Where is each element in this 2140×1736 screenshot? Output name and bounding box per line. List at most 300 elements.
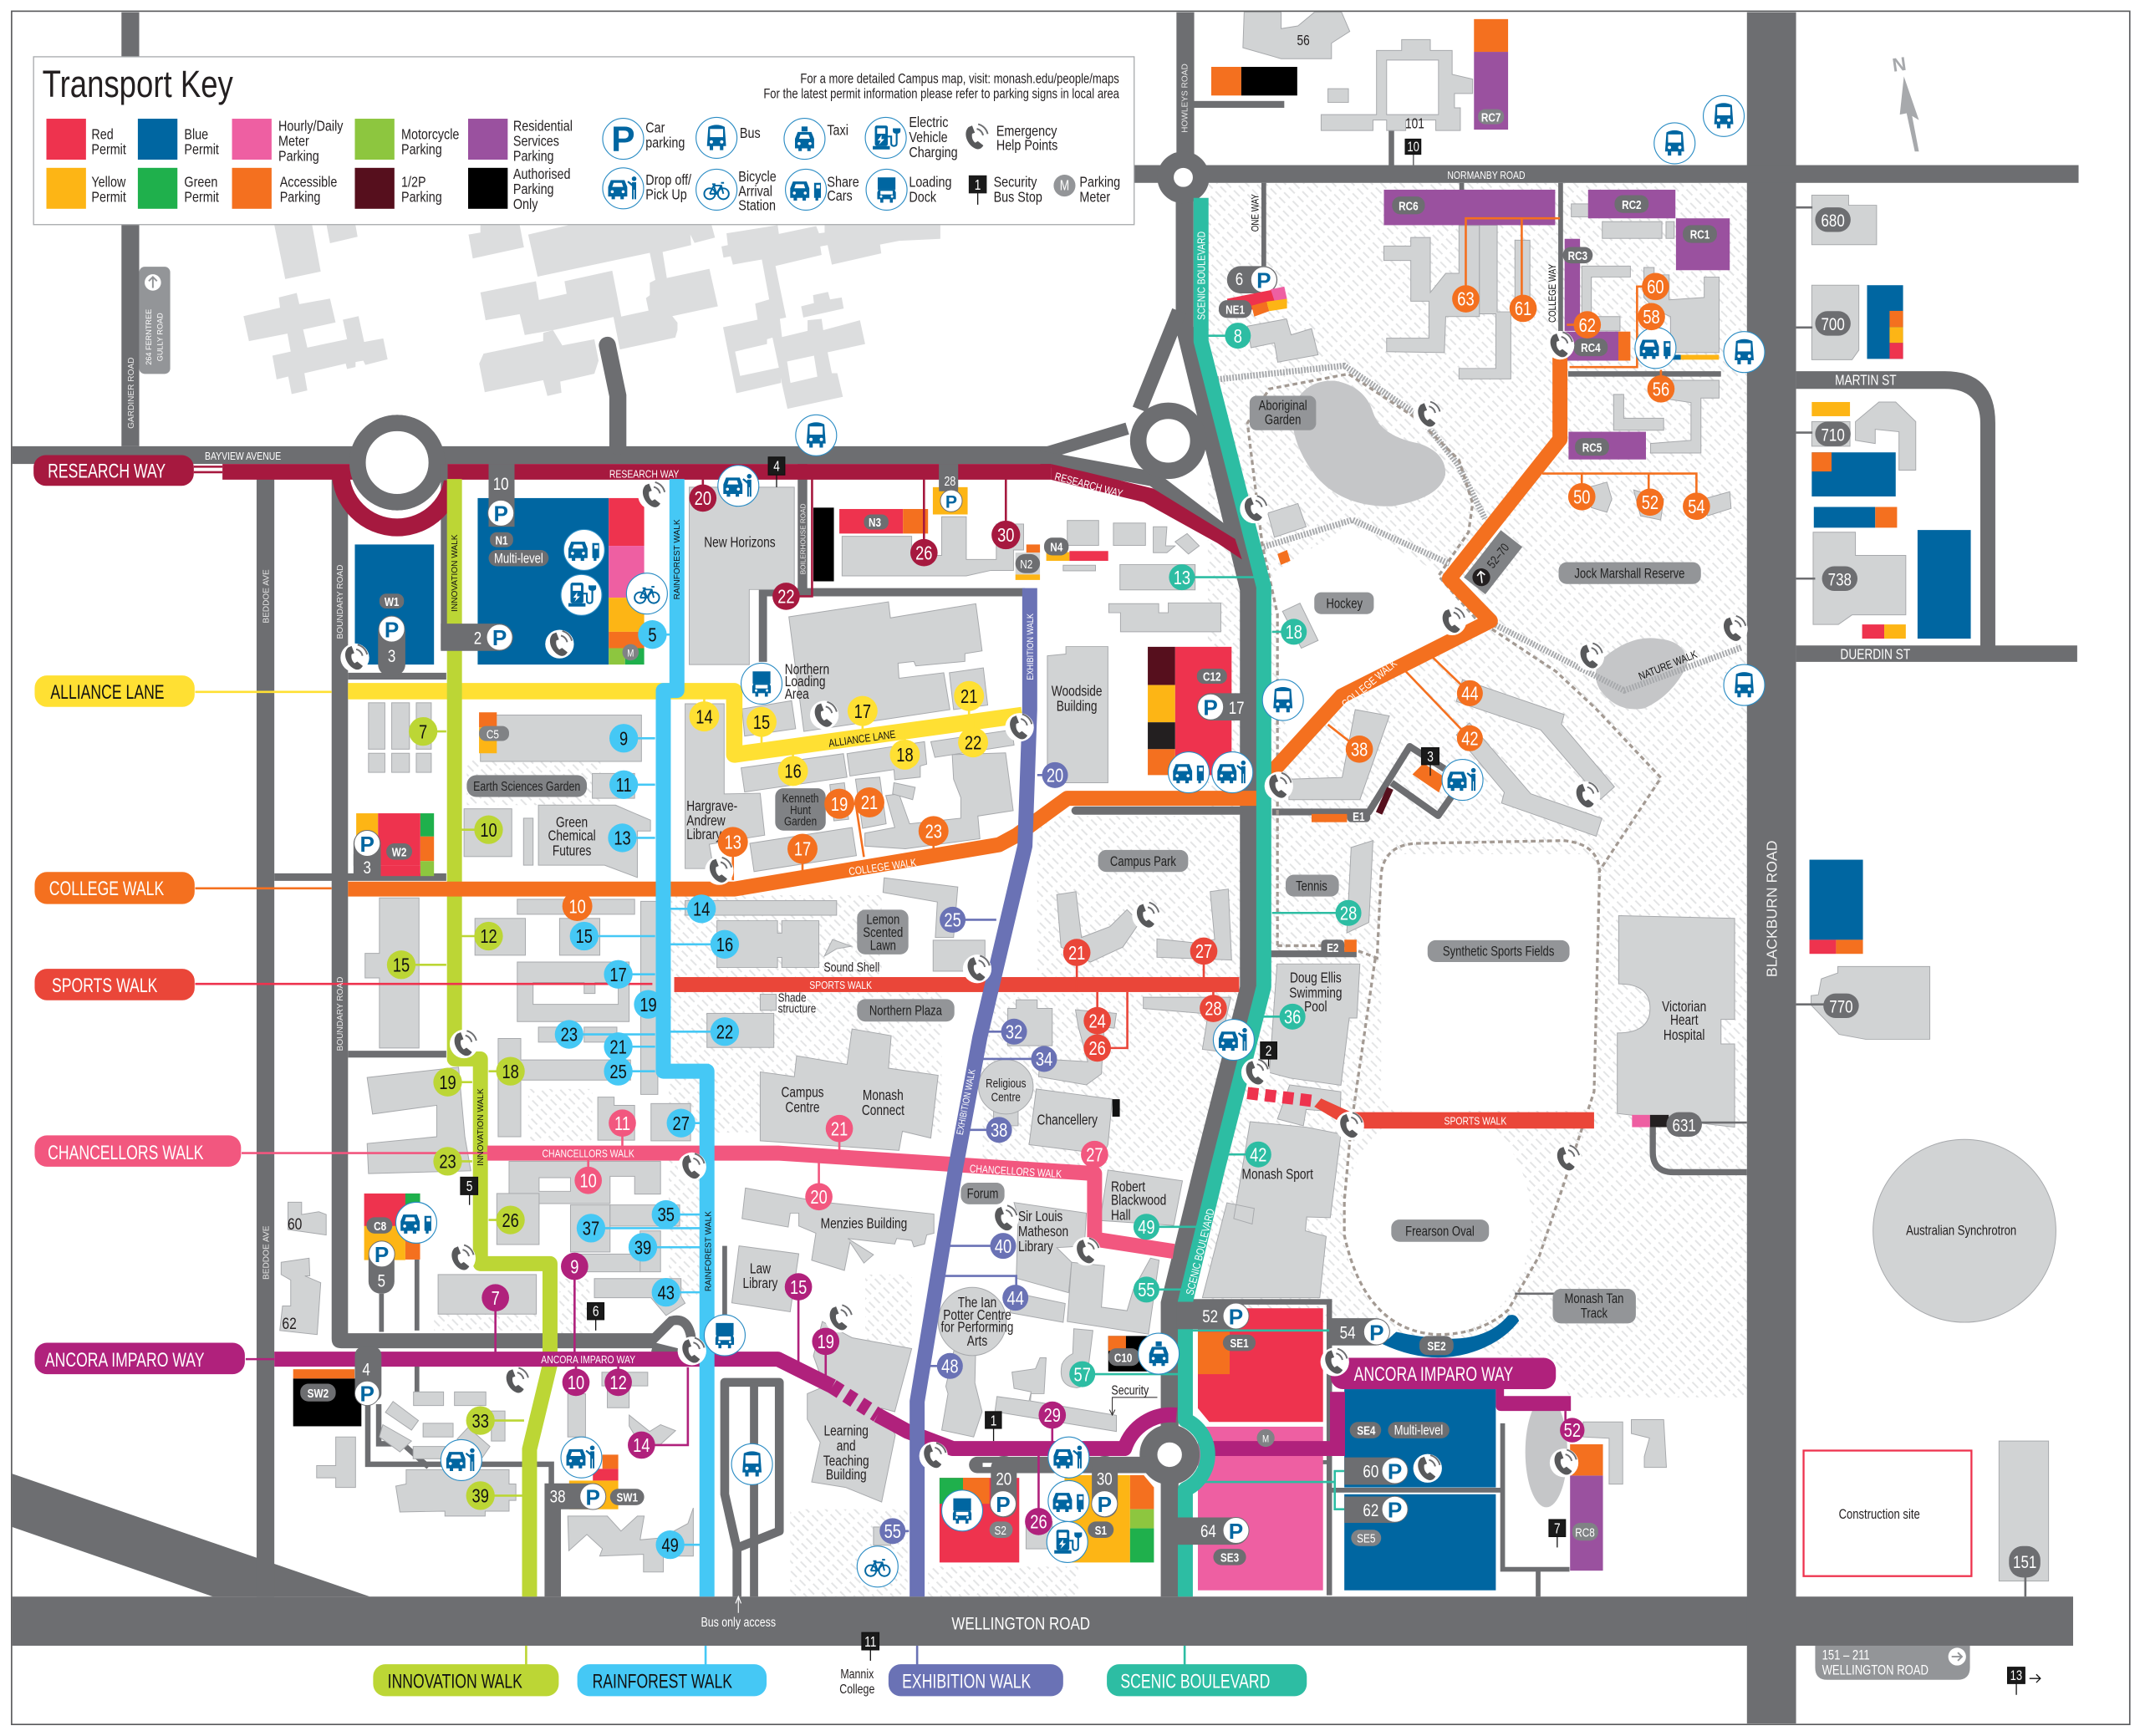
stub: 20 P: P <box>996 1492 1011 1517</box>
bus stop 1: 1 <box>991 1413 996 1429</box>
name: The Ian Potter Centre: Arts <box>967 1333 987 1349</box>
stub: 54 P <box>1329 1318 1389 1346</box>
code: SE2: SE2 <box>1427 1339 1446 1353</box>
stub: 10 P: 10 <box>493 475 509 495</box>
number badges: College Walk: 13 <box>725 832 741 853</box>
parking: C10 <box>1108 1336 1154 1372</box>
panel: Transport Key <box>33 57 1134 225</box>
key: security bus stop: 1 <box>975 178 981 193</box>
hatched campus grounds <box>434 183 1747 1596</box>
code: N3 <box>864 515 889 530</box>
pill: Exhibition Walk: EXHIBITION WALK <box>902 1670 1031 1693</box>
number badges: Ancora Imparo Way: 12 <box>609 1372 627 1394</box>
number badges: Research Way <box>689 485 1020 610</box>
icon: bus north east 2 <box>1654 123 1695 164</box>
name: Learning and Teaching Building <box>823 1423 869 1483</box>
key swatch labels: Permit <box>184 189 219 206</box>
sports fields and ovals white space <box>1272 524 1597 1336</box>
building: 101 <box>1321 39 1473 130</box>
walk: Exhibition Walk <box>917 588 1030 1596</box>
stub: 54 P: 54 <box>1340 1324 1356 1343</box>
road name: Rainforest Walk south: RAINFOREST WALK <box>705 1211 714 1291</box>
key swatch labels: Permit <box>184 141 219 158</box>
number badges: Scenic Boulevard: 55 <box>1138 1280 1155 1301</box>
code: RC5: RC5 <box>1582 440 1602 455</box>
parking: S1 <box>1064 1475 1130 1562</box>
pill: Ancora Imparo Way east <box>1331 1357 1571 1411</box>
name: Robert Blackwood Hall: Blackwood <box>1111 1193 1166 1209</box>
key icon labels: Help Points <box>996 137 1057 154</box>
key icon labels: Drop off/ <box>645 172 691 189</box>
pill: Sports Walk: SPORTS WALK <box>52 974 157 997</box>
key swatch labels: Permit <box>91 189 126 206</box>
stub: 62 P <box>1344 1496 1408 1523</box>
stub: 10 P: P <box>493 501 508 527</box>
number badges: Alliance Lane: 21 <box>960 686 977 707</box>
road name: Ancora Imparo Way: ANCORA IMPARO WAY <box>541 1353 635 1366</box>
key icon labels: Taxi <box>827 122 848 139</box>
key icon labels: Bus <box>740 125 761 141</box>
building: 42 <box>1456 723 1602 836</box>
code: S2: S2 <box>995 1524 1006 1537</box>
parking: SE5 <box>1344 1494 1495 1591</box>
road name: Beddoe Ave south: BEDDOE AVE <box>262 1225 272 1280</box>
parking: SW2 <box>293 1378 361 1426</box>
key swatch labels: Parking <box>513 148 554 165</box>
parking: black loading bay <box>813 507 834 582</box>
parking: N2 <box>1027 544 1040 552</box>
small car park codes <box>300 109 1717 1565</box>
pill: Chancellors Walk <box>34 1135 241 1167</box>
label: Kenneth Hunt Garden: Garden <box>784 815 817 828</box>
number badges: Innovation Walk: 18 <box>502 1061 519 1082</box>
pill: Exhibition Walk <box>889 1664 1063 1696</box>
label: Aboriginal Garden: Aboriginal <box>1259 399 1307 414</box>
name: Sir Louis Matheson Library: Matheson <box>1018 1224 1068 1240</box>
code: N4: N4 <box>1050 540 1063 554</box>
code: SW2: SW2 <box>308 1387 329 1400</box>
stub: 4 P <box>354 1347 381 1407</box>
stub: 2 P: 2 <box>474 629 482 649</box>
number badges: Ancora Imparo Way: 26 <box>1030 1512 1047 1533</box>
key icon labels: Cars <box>827 188 853 204</box>
label: Kenneth Hunt Garden <box>775 788 826 831</box>
code: C10: C10 <box>1114 1351 1132 1365</box>
stub: 38 P: 38 <box>550 1488 566 1507</box>
label: Synthetic Sports Fields: Synthetic Sports Fields <box>1443 944 1554 960</box>
name: Woodside Building: Building <box>1057 699 1098 715</box>
label: Forum <box>960 1183 1005 1204</box>
road name: Exhibition Walk: EXHIBITION WALK <box>1026 613 1036 680</box>
code: SE2 <box>1419 1336 1454 1355</box>
icon: taxi <box>1139 1333 1180 1374</box>
code: SE4 Multi-level: Multi-level <box>1394 1423 1443 1438</box>
name: Security: Security <box>1111 1382 1149 1397</box>
name: Religious Centre: Religious <box>986 1077 1027 1091</box>
thin east road system <box>1332 1423 1570 1596</box>
number badges: Alliance Lane <box>689 681 988 786</box>
key swatch labels: Blue <box>184 126 208 143</box>
building names <box>282 33 2016 1696</box>
name: Learning and Teaching Building: and <box>837 1438 856 1454</box>
tag: 680 <box>1815 207 1851 232</box>
number badges: Rainforest Walk: 14 <box>693 899 710 920</box>
code: RC2 <box>1614 195 1648 213</box>
parking: C5 <box>479 712 497 727</box>
key icon labels: Meter <box>1079 189 1111 206</box>
number badges: Alliance Lane: 22 <box>965 732 981 754</box>
code: RC7: RC7 <box>1481 110 1501 125</box>
road name: Alliance Lane: ALLIANCE LANE <box>828 728 896 750</box>
walk: Scenic Boulevard <box>1185 198 1264 1596</box>
number badges: College Walk: 38 <box>1351 740 1368 761</box>
tag: 700: 700 <box>1821 315 1845 335</box>
stub: 30 P: P <box>1098 1492 1112 1517</box>
north arrow <box>1891 53 1919 151</box>
stub: 3 P W2: 3 <box>363 858 371 878</box>
code: C5: C5 <box>487 727 499 741</box>
name: Mannix College <box>839 1667 875 1696</box>
tag: 770: 770 <box>1829 998 1853 1017</box>
number badges: Ancora Imparo Way <box>482 1253 1585 1535</box>
name: The Ian Potter Centre <box>941 1296 1013 1349</box>
stub: 3 P W1: 3 <box>388 647 395 666</box>
name: Sir Louis Matheson Library <box>1018 1209 1068 1255</box>
key icon labels: Loading <box>909 174 951 191</box>
tag: 631: 631 <box>1673 1117 1696 1136</box>
bus stop 3 <box>1422 748 1439 776</box>
label: Lemon Scented Lawn: Lawn <box>870 939 896 954</box>
number badges: Ancora Imparo Way: 19 <box>818 1331 834 1353</box>
label: Campus Park: Campus Park <box>1110 855 1176 869</box>
name: Victorian Heart Hospital <box>1662 999 1706 1044</box>
parking: NE1: NE1 <box>1225 303 1246 317</box>
name: Campus Centre: Campus <box>782 1085 824 1101</box>
key swatch labels: Only <box>513 196 538 212</box>
roundabouts <box>358 160 1201 502</box>
building: Ian Potter Centre <box>942 1344 982 1437</box>
road name: Gardiner Road: GARDINER ROAD <box>127 358 136 429</box>
name: Woodside Building: Woodside <box>1052 684 1103 700</box>
label: Tennis: Tennis <box>1296 879 1327 894</box>
bus stop 13 <box>2008 1667 2041 1695</box>
name: Sound Shell: Sound Shell <box>823 960 879 975</box>
key title: Transport Key <box>43 63 233 105</box>
number badges: Chancellors Walk: 20 <box>810 1187 828 1209</box>
name: New Horizons: New Horizons <box>704 535 776 551</box>
bus lanes <box>725 1382 779 1596</box>
key icon labels: Charging <box>909 144 958 160</box>
number badges: Rainforest Walk: 22 <box>716 1022 733 1043</box>
bus stop 4 <box>768 457 785 487</box>
code: S2 <box>990 1521 1012 1538</box>
stub: 30 P: 30 <box>1097 1470 1113 1489</box>
icon: share cars RC <box>1635 328 1676 369</box>
icon: bus <box>796 415 837 456</box>
key icons: P <box>611 120 635 159</box>
parking: N3 <box>839 509 903 533</box>
code: W1 <box>380 593 404 608</box>
number badges: College Walk: 58 <box>1643 307 1660 328</box>
key icon labels: Vehicle <box>909 129 948 145</box>
road name: Nature Walk: NATURE WALK <box>1637 648 1699 683</box>
road name: Scenic Boulevard: SCENIC BOULEVARD <box>1195 232 1208 320</box>
signage: 264 Ferntree Gully Road: 264 FERNTREE <box>145 309 153 365</box>
name: The Ian Potter Centre: for Performing <box>941 1320 1013 1336</box>
bus stop 6: 6 <box>593 1304 599 1320</box>
stub: 2 P: P <box>492 625 507 650</box>
number badges: Exhibition Walk: 48 <box>941 1357 958 1377</box>
name: Monash Connect: Connect <box>862 1103 905 1118</box>
label: Monash Tan Track <box>1552 1289 1636 1323</box>
building: Australian Synchrotron <box>1873 1139 2056 1322</box>
parking: SE3 pink <box>1198 1427 1323 1591</box>
number badges: Innovation Walk <box>387 717 525 1510</box>
icon: drop off S1 <box>1048 1437 1089 1478</box>
number badges: Rainforest Walk: 11 <box>616 775 632 796</box>
name: Robert Blackwood Hall: Robert <box>1111 1179 1146 1195</box>
parking: W1 <box>354 544 434 664</box>
parking: NE1 <box>1219 287 1287 318</box>
key icon labels: Bicycle <box>738 169 777 186</box>
building: 44 <box>1456 680 1614 799</box>
name: Learning and Teaching Building: Building <box>826 1467 867 1483</box>
road name: Chancellors Walk east: CHANCELLORS WALK <box>969 1162 1062 1180</box>
code: E2: E2 <box>1327 941 1338 955</box>
key icon labels <box>645 114 1120 214</box>
grey place labels <box>466 395 1701 1323</box>
label: Campus Park <box>1098 850 1188 872</box>
code: S1: S1 <box>1095 1524 1108 1537</box>
number badges: Alliance Lane: 17 <box>854 701 871 722</box>
number badges: Innovation Walk: 7 <box>419 721 427 743</box>
icon: drop off north <box>718 466 759 507</box>
walk: Innovation Walk <box>455 479 550 1596</box>
number badges: Alliance Lane: 18 <box>896 745 914 766</box>
re-draw ring over Research Way <box>358 423 436 502</box>
icon: bus scenic <box>1262 680 1303 720</box>
name: Victorian Heart Hospital: Victorian <box>1662 999 1706 1015</box>
stub: 64 P: P <box>1229 1519 1243 1544</box>
building: Doug Ellis Swimming Pool <box>1269 964 1360 1085</box>
label: Kenneth Hunt Garden: Kenneth <box>782 792 818 805</box>
number badges: Exhibition Walk: 38 <box>991 1120 1007 1142</box>
signage: 151-211 Wellington Road: WELLINGTON ROAD <box>1822 1663 1929 1678</box>
name: Australian Synchrotron: Australian Synchrotron <box>1906 1224 2016 1239</box>
label: Monash Tan Track: Track <box>1581 1306 1608 1321</box>
pill: Innovation Walk: INNOVATION WALK <box>388 1670 522 1693</box>
label: Earth Sciences Garden: Earth Sciences Garden <box>473 779 580 793</box>
number badges: College Walk: 52 <box>1642 492 1658 514</box>
number badges: College Walk: 56 <box>1653 379 1669 400</box>
code: RC6: RC6 <box>1399 199 1419 213</box>
Bayview Avenue <box>13 446 1051 464</box>
label: Monash Tan Track: Monash Tan <box>1565 1292 1623 1307</box>
name: 56: 56 <box>1297 33 1310 48</box>
key note: For a more detailed Campus map, visit: monash.edu/people/maps <box>800 72 1119 87</box>
number badges: Research Way: 26 <box>915 543 932 564</box>
south roundabout <box>1149 1433 1190 1476</box>
tag: 680: 680 <box>1821 211 1845 232</box>
code: C5 <box>479 726 509 741</box>
road name: College Way: COLLEGE WAY <box>1547 263 1559 323</box>
pill: Research Way <box>33 455 194 486</box>
parking: C8 <box>364 1194 420 1226</box>
name: 62: 62 <box>282 1315 297 1333</box>
south internal road <box>977 1460 1146 1470</box>
name: Northern Loading Area: Loading <box>785 675 826 690</box>
number badges: Ancora Imparo Way: 15 <box>790 1277 807 1298</box>
code: S1 <box>1088 1521 1113 1538</box>
name: Religious Centre <box>986 1077 1027 1104</box>
road name: Innovation Walk: INNOVATION WALK <box>451 534 460 612</box>
bus stop 2 <box>1261 1042 1276 1072</box>
walk: College Walk <box>348 798 1262 889</box>
key swatch labels: Red <box>91 126 114 143</box>
stub: 20 P: 20 <box>996 1470 1011 1489</box>
code: W1: W1 <box>385 595 400 608</box>
key swatch labels: Parking <box>401 189 442 206</box>
road name: Boundary Road: BOUNDARY ROAD <box>336 565 345 639</box>
stub road north <box>608 345 618 446</box>
tag: 738 <box>1822 567 1857 591</box>
label: Hockey: Hockey <box>1326 597 1363 612</box>
stub: 52 P <box>1176 1302 1249 1329</box>
parking: RC residential <box>1384 190 1555 225</box>
stub: 52 P: P <box>1229 1304 1243 1329</box>
road name: Exhibition Walk south: EXHIBITION WALK <box>955 1068 978 1136</box>
building: Law Library <box>731 1246 799 1311</box>
key icon labels: Electric <box>909 114 948 130</box>
number badges: Sports Walk: 21 <box>1068 943 1085 964</box>
name: Green Chemical Futures: Futures <box>553 843 592 859</box>
key note <box>763 72 1120 102</box>
name: 101: 101 <box>1405 116 1424 132</box>
icons <box>340 95 1765 1587</box>
stub: 60 P: 60 <box>1363 1463 1378 1482</box>
bus stop 2: 2 <box>1266 1044 1271 1059</box>
stub: 3 P W1 <box>378 616 405 675</box>
key icon labels: Emergency <box>996 123 1057 140</box>
code: SE4 <box>1350 1422 1381 1438</box>
stub: 62 P: 62 <box>1363 1501 1378 1520</box>
number badges: Ancora Imparo Way: 7 <box>492 1288 500 1309</box>
building: Religious Centre <box>994 1108 1018 1126</box>
code: RC4: RC4 <box>1581 341 1601 355</box>
number badges: Rainforest Walk: 19 <box>639 995 657 1016</box>
number badges: Rainforest Walk: 25 <box>609 1061 627 1082</box>
pill: Scenic Boulevard <box>1107 1664 1307 1696</box>
name: The Ian Potter Centre: Potter Centre <box>943 1307 1011 1323</box>
building: Chancellery <box>1029 1089 1113 1154</box>
label: Aboriginal Garden <box>1250 395 1316 430</box>
tag: 631 <box>1666 1112 1702 1137</box>
label: Aboriginal Garden: Garden <box>1265 414 1301 428</box>
Howleys Road <box>1176 13 1195 169</box>
stub: 2 P <box>441 624 513 651</box>
name: Law Library: Library <box>742 1276 778 1292</box>
name: Hargrave-Andrew Library <box>686 798 737 843</box>
parking: N1 multi-level <box>477 498 609 664</box>
number badges: Scenic Boulevard: 49 <box>1138 1217 1155 1238</box>
signage: 264 Ferntree Gully Road: GULLY ROAD <box>155 313 164 361</box>
name: Victorian Heart Hospital: Hospital <box>1664 1028 1704 1044</box>
bus stop 11: 11 <box>864 1634 876 1650</box>
code: SW1 <box>610 1489 645 1505</box>
bus stop 5: 5 <box>466 1179 472 1194</box>
bus stop 11 <box>862 1632 879 1661</box>
name: Mannix College: Mannix <box>840 1667 874 1681</box>
Boundary Road <box>332 479 655 1348</box>
road name: Innovation Walk south: INNOVATION WALK <box>476 1088 486 1166</box>
number badges: Rainforest Walk: 13 <box>614 828 631 849</box>
code: C8: C8 <box>374 1219 386 1233</box>
number badges: Rainforest Walk: 16 <box>716 934 733 955</box>
stub: 38 P: P <box>586 1484 600 1509</box>
name: Sir Louis Matheson Library: Library <box>1018 1240 1053 1255</box>
code: RC5 <box>1575 438 1609 456</box>
icon: bicycle N1 <box>626 573 667 614</box>
icon: EV charging S1 <box>1047 1521 1088 1562</box>
bus stop 1 <box>986 1412 1001 1441</box>
road name: Sports Walk east: SPORTS WALK <box>1444 1114 1506 1128</box>
phones <box>340 331 1748 1483</box>
small road tag 52-70: 52–70 <box>1485 541 1512 571</box>
bus stop 4: 4 <box>773 459 780 475</box>
key icon labels: Parking <box>1079 174 1120 191</box>
code: SE1: SE1 <box>1230 1336 1249 1351</box>
road name: Rainforest Walk: RAINFOREST WALK <box>673 519 682 599</box>
icon: drop off pool <box>1213 1020 1254 1061</box>
number badges: Sports Walk: 28 <box>1205 999 1222 1020</box>
stub: 60 P <box>1344 1458 1408 1484</box>
Wellington Road <box>13 1596 2073 1646</box>
number badges: Innovation Walk: 10 <box>480 820 497 841</box>
building: Learning and Teaching Building <box>808 1321 912 1502</box>
building: central <box>883 878 958 938</box>
code: E1: E1 <box>1353 810 1365 823</box>
road name: Bayview Avenue: BAYVIEW AVENUE <box>205 450 281 463</box>
building: east campus <box>1384 226 1480 353</box>
name: Mannix College: College <box>839 1682 875 1696</box>
name: Menzies Building: Menzies Building <box>821 1216 907 1232</box>
key swatch labels: Yellow <box>91 174 126 191</box>
pill: Innovation Walk <box>373 1664 558 1696</box>
number badges: Exhibition Walk: 44 <box>1007 1288 1024 1309</box>
number badges: Exhibition Walk: 20 <box>1047 766 1063 787</box>
icon: loading dock rainforest <box>704 1315 745 1356</box>
stub: 28 P: 28 <box>944 474 955 489</box>
stub: 54 P: P <box>1369 1320 1384 1345</box>
number badges: Innovation Walk: 23 <box>439 1152 456 1173</box>
building: Hargrave-Andrew Library <box>685 704 765 868</box>
number badges: College Walk: 21 <box>861 792 878 814</box>
parking: SE2 crescent <box>1383 1315 1519 1357</box>
walk: Rainforest Walk <box>663 479 707 1596</box>
road name: Research Way angled: RESEARCH WAY <box>1053 470 1124 501</box>
number badges: Chancellors Walk: 10 <box>580 1171 597 1192</box>
parking: misc <box>1632 1115 1650 1128</box>
code: RC3: RC3 <box>1568 249 1587 262</box>
code: W2 <box>386 843 412 860</box>
code: RC8: RC8 <box>1575 1525 1595 1540</box>
key swatch labels: Accessible <box>280 174 337 191</box>
road name: Blackburn Road: BLACKBURN ROAD <box>1764 841 1781 977</box>
number badges: Rainforest Walk: 17 <box>609 965 627 985</box>
number badges: Exhibition Walk: 40 <box>995 1236 1011 1257</box>
label: Northern Plaza: Northern Plaza <box>869 1004 943 1019</box>
number badges: Rainforest Walk <box>555 620 739 1559</box>
